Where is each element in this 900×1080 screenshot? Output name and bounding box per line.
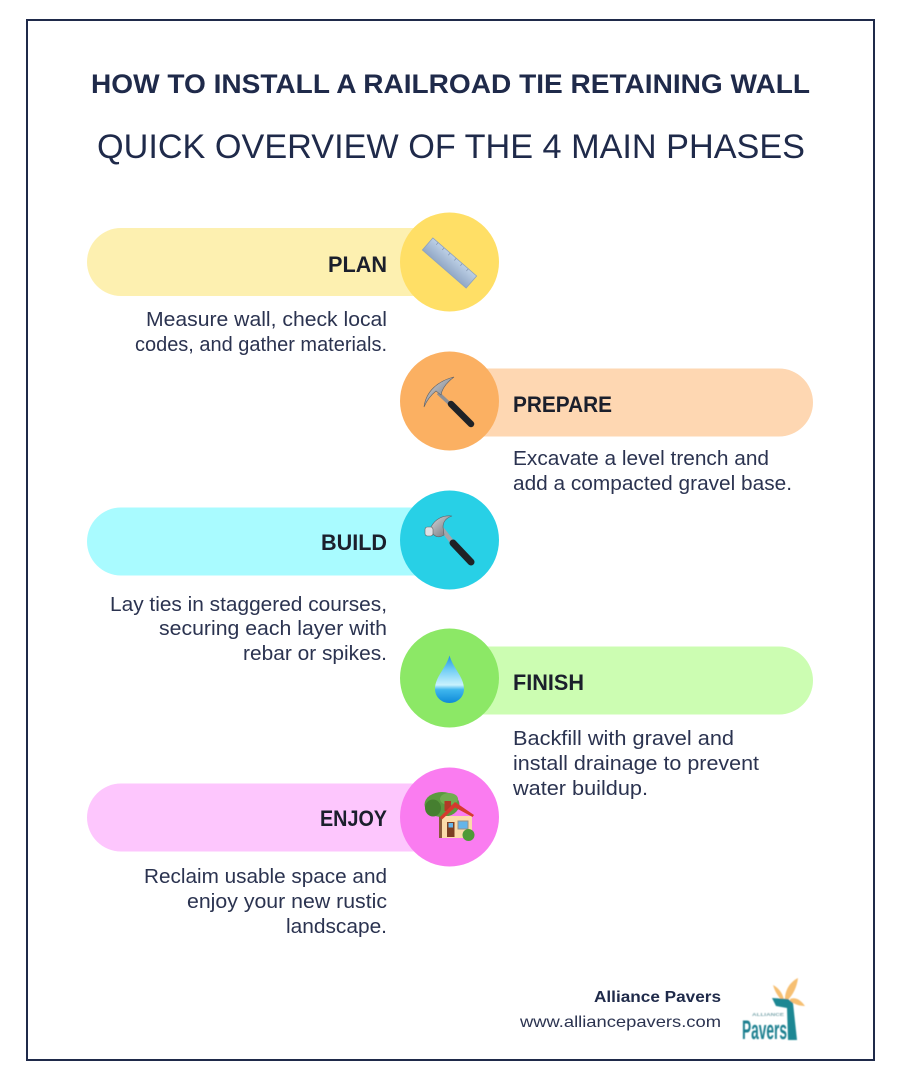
finish pill — [450, 646, 813, 714]
build description: rebar or spikes. — [243, 643, 387, 665]
finish circle — [400, 628, 499, 728]
step: finish — [400, 628, 813, 800]
enjoy description: Reclaim usable space and — [144, 866, 387, 888]
finish label: FINISH — [513, 670, 584, 695]
prepare pill — [450, 368, 813, 436]
build label: BUILD — [321, 530, 387, 555]
footer: website: www.alliancepavers.com — [519, 1014, 721, 1031]
step: build — [87, 490, 499, 665]
plan circle — [400, 212, 499, 312]
step: enjoy — [87, 768, 499, 938]
plan label: PLAN — [328, 252, 387, 277]
finish description: Backfill with gravel and — [513, 728, 734, 750]
icon: water drop — [435, 656, 464, 703]
logo: Alliance Pavers — [742, 978, 805, 1045]
prepare description: Excavate a level trench and — [513, 448, 769, 470]
build circle — [400, 490, 499, 590]
step: prepare — [400, 352, 813, 495]
finish description: install drainage to prevent — [513, 753, 759, 775]
logo: Alliance Pavers: ALLIANCE — [752, 1012, 784, 1017]
build description: securing each layer with — [159, 618, 387, 640]
build pill — [87, 508, 449, 576]
icon: ruler — [422, 238, 477, 288]
logo: Alliance Pavers: Pavers — [742, 1015, 787, 1045]
icon: hammer — [425, 516, 471, 562]
icon: pick — [424, 377, 471, 424]
enjoy pill — [87, 784, 449, 852]
finish description: water buildup. — [512, 778, 648, 800]
footer: company name: Alliance Pavers — [594, 989, 721, 1006]
title: HOW TO INSTALL A RAILROAD TIE RETAINING WALL — [91, 69, 810, 99]
prepare description: add a compacted gravel base. — [513, 473, 792, 495]
plan description: Measure wall, check local — [146, 309, 387, 331]
step: plan — [87, 212, 499, 356]
enjoy circle — [400, 768, 499, 866]
prepare circle — [400, 352, 499, 450]
prepare label: PREPARE — [513, 392, 612, 417]
enjoy description: enjoy your new rustic — [187, 891, 387, 913]
build description: Lay ties in staggered courses, — [110, 594, 387, 616]
plan description: codes, and gather materials. — [135, 334, 387, 356]
enjoy label: ENJOY — [320, 806, 387, 831]
subtitle: QUICK OVERVIEW OF THE 4 MAIN PHASES — [97, 128, 805, 166]
icon: house and tree — [424, 792, 474, 841]
plan pill — [87, 228, 449, 296]
enjoy description: landscape. — [286, 916, 387, 938]
